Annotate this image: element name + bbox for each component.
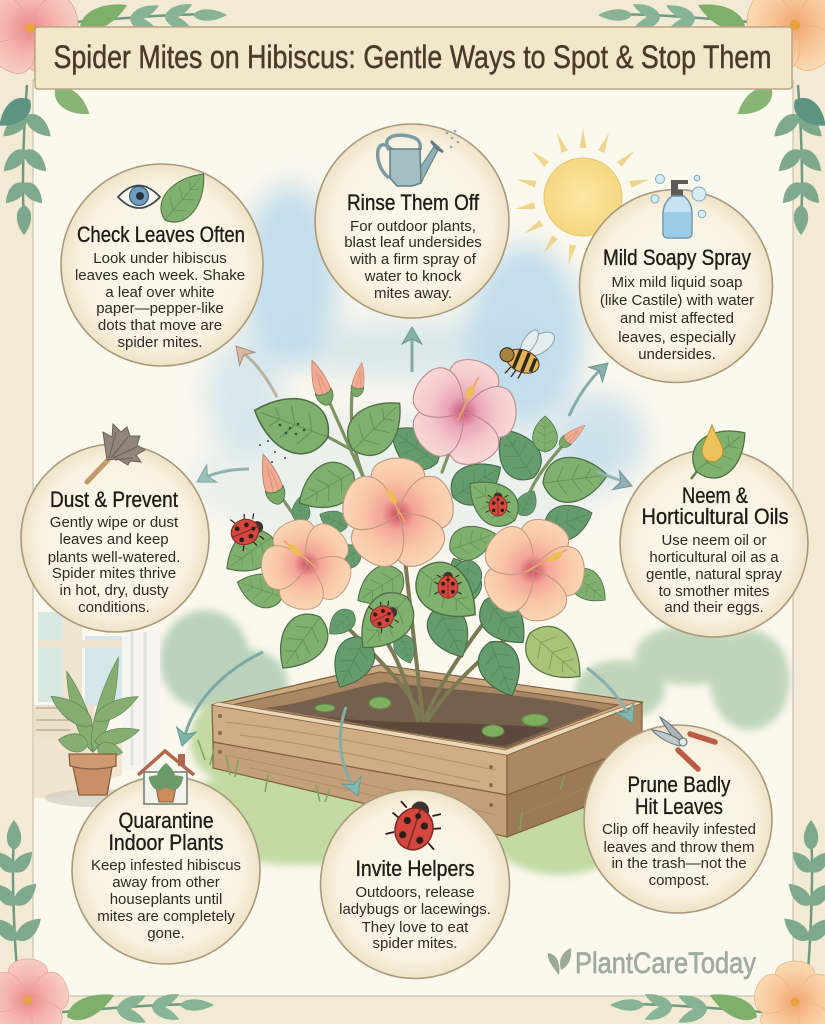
panel: quarantine indoor plants — [72, 751, 260, 964]
body text: water to knock — [364, 268, 462, 285]
panel: dust and prevent — [21, 424, 209, 632]
stamen tips — [287, 384, 564, 564]
heading: Invite Helpers — [356, 856, 474, 881]
bee — [493, 314, 562, 389]
body text: undersides. — [638, 346, 716, 363]
body text: dots that move are — [98, 317, 222, 334]
body text: Keep infested hibiscus — [91, 857, 241, 874]
icon: spray bottle — [651, 174, 706, 238]
corner: bottom-left foliage — [0, 820, 214, 1024]
body text: and their eggs. — [664, 599, 764, 616]
arrow to helpers — [340, 707, 367, 800]
panel: prune badly hit leaves — [584, 717, 772, 913]
body text: spider mites. — [117, 334, 203, 351]
body text — [91, 857, 241, 942]
panel: neem and horticultural oils: Horticultural Oils — [642, 504, 788, 529]
body text: Look under hibiscus — [93, 250, 227, 267]
panel: quarantine indoor plants: Indoor Plants — [108, 830, 224, 855]
heading: Prune Badly — [628, 772, 730, 797]
arrows — [172, 327, 642, 800]
body text — [48, 514, 180, 616]
panel: prune badly hit leaves: Hit Leaves — [635, 794, 723, 819]
heading: Rinse Them Off — [347, 190, 480, 215]
distant foliage right — [575, 625, 790, 730]
panel: invite helpers — [320, 790, 510, 978]
icon: house with plant — [138, 751, 194, 804]
arrow to soapy spray — [569, 356, 615, 416]
body text: away from other — [112, 874, 220, 891]
body text: leaves, especially — [618, 329, 736, 346]
body text — [339, 884, 491, 952]
body text: in the trash—not the — [611, 855, 747, 872]
body text: Mix mild liquid soap — [612, 274, 742, 291]
leaf spots — [259, 423, 305, 463]
arrow to prune — [587, 668, 642, 728]
body text: paper—pepper-like — [96, 300, 224, 317]
body text: For outdoor plants, — [350, 218, 476, 235]
background scene — [34, 185, 790, 875]
body text — [75, 250, 245, 351]
distant foliage left — [160, 610, 288, 720]
body text — [344, 218, 482, 302]
icon: eye — [118, 186, 160, 208]
panel: rinse them off — [315, 124, 509, 318]
body text: compost. — [649, 872, 709, 889]
buds — [254, 357, 589, 507]
body text: Spider mites thrive — [52, 565, 176, 582]
hibiscus plant — [216, 344, 614, 720]
window panes — [34, 612, 123, 737]
body text — [602, 821, 756, 889]
heading: Dust & Prevent — [50, 487, 178, 512]
arrow to dust — [192, 465, 249, 491]
body text: Use neem oil or — [661, 532, 767, 549]
body text: a leaf over white — [105, 284, 215, 301]
body text: They love to eat — [362, 919, 469, 936]
floor — [34, 737, 122, 798]
heading: Neem & — [682, 483, 748, 508]
body text: leaves each week. Shake — [75, 267, 245, 284]
icon: ladybug — [383, 794, 447, 857]
logo: PlantCareToday — [575, 947, 756, 980]
panel: check leaves often — [61, 163, 263, 366]
body text: in hot, dry, dusty — [60, 582, 169, 599]
body text: mites are completely — [97, 908, 235, 925]
body text: leaves and throw them — [604, 839, 754, 856]
stems — [340, 560, 505, 720]
raised wooden bed — [198, 665, 642, 837]
body text: with a firm spray of — [349, 251, 477, 268]
body text: to smother mites — [659, 583, 769, 600]
arrow to rinse — [402, 327, 422, 372]
corner: top-left foliage — [0, 0, 227, 235]
body text: Outdoors, release — [355, 884, 475, 901]
grass — [175, 700, 630, 875]
title banner — [35, 27, 792, 89]
icon: leaf — [152, 163, 216, 231]
stamens — [284, 378, 566, 572]
body text: leaves and keep — [59, 531, 169, 548]
icon: oil drop and leaf — [683, 416, 758, 488]
heading: Quarantine — [118, 808, 214, 833]
body text: conditions. — [78, 599, 150, 616]
body text: blast leaf undersides — [344, 234, 482, 251]
body text: ladybugs or lacewings. — [339, 901, 491, 918]
body text: and mist affected — [620, 310, 734, 327]
arrow to check leaves — [228, 339, 277, 397]
body text — [646, 532, 782, 616]
panel: neem and horticultural oils — [620, 416, 808, 637]
ladybugs — [226, 492, 510, 635]
body text: (like Castile) with water — [600, 292, 754, 309]
heading: Mild Soapy Spray — [603, 245, 751, 270]
corner: top-right foliage — [598, 0, 825, 235]
body text: houseplants until — [110, 891, 222, 908]
flowers — [390, 344, 535, 485]
sun — [514, 128, 652, 266]
floor shadow — [45, 789, 145, 807]
icon: logo leaf — [548, 948, 571, 975]
heading: Check Leaves Often — [77, 222, 245, 247]
icon: feather duster — [87, 424, 145, 482]
icon: pruning shears — [652, 717, 715, 769]
panel: mild soapy spray — [580, 174, 772, 382]
body text: spider mites. — [372, 935, 458, 952]
icon: watering can — [378, 130, 459, 186]
body text: plants well-watered. — [48, 549, 180, 566]
corner: bottom-right foliage — [610, 820, 825, 1024]
arrow to neem — [597, 471, 635, 495]
body text: gentle, natural spray — [646, 566, 782, 583]
curtain — [122, 630, 160, 770]
sky wash — [190, 185, 645, 550]
body text: Clip off heavily infested — [602, 821, 756, 838]
body text: Gently wipe or dust — [50, 514, 179, 531]
arrow to quarantine — [172, 652, 263, 749]
leaves back — [291, 414, 598, 703]
body text — [600, 274, 754, 363]
body text: horticultural oil as a — [649, 549, 779, 566]
potted plant — [46, 655, 142, 795]
body text: gone. — [147, 925, 185, 942]
leaves front — [216, 385, 614, 693]
body text: mites away. — [374, 285, 452, 302]
